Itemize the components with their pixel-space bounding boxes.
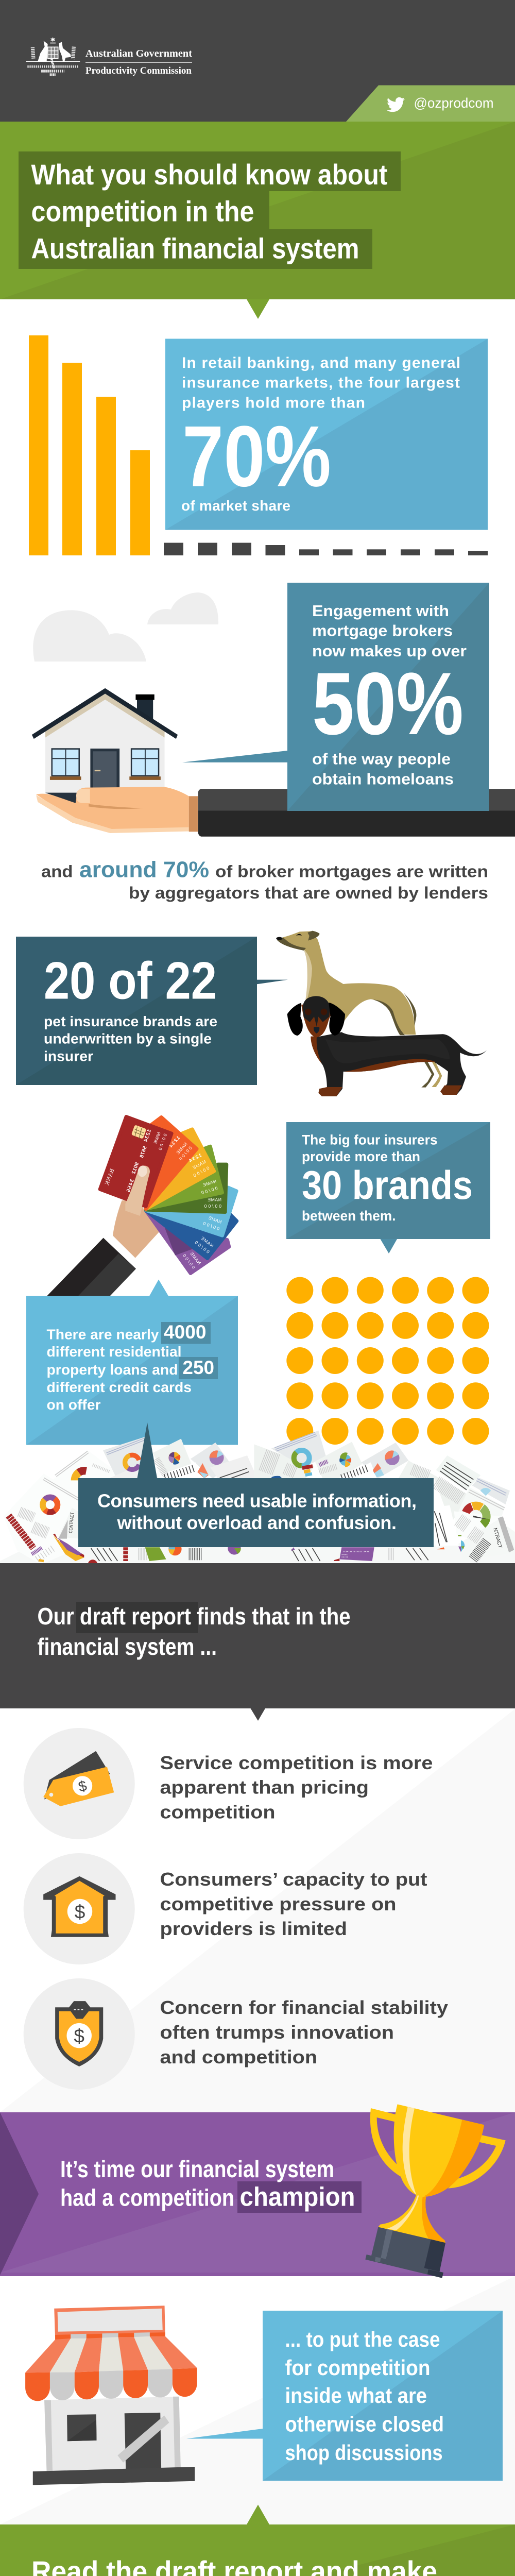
callout: 4000 loans and 250 credit cards: on offer — [46, 1397, 101, 1413]
card lettering: BANK — [104, 1168, 115, 1187]
callout: 4000 loans and 250 credit cards: different credit cards — [46, 1379, 192, 1395]
illustration: closed shop — [25, 2306, 197, 2485]
callout: case for competition: inside what are — [285, 2383, 427, 2408]
illustration: clouds — [33, 592, 218, 662]
callout: case for competition: shop discussions — [285, 2441, 443, 2465]
callout: 30 brands: The big four insurers — [302, 1132, 438, 1148]
callout: 20 of 22 pet insurance brands — [16, 937, 288, 1085]
callout: 4000 loans and 250 credit cards — [26, 1280, 238, 1445]
twitter tab: @ozprodcom — [414, 95, 493, 111]
illustration: pile of documents, right: 1234 5678 9012 3456 — [342, 1550, 370, 1553]
callout: 20 of 22 pet insurance brands: underwritten by a single — [44, 1030, 212, 1047]
panel: draft report findings heading — [0, 1563, 515, 1721]
illustration: trophy — [365, 2104, 506, 2278]
callout: 20 of 22 pet insurance brands: pet insurance brands are — [44, 1013, 217, 1029]
text block: around 70% of broker mortgages — [41, 857, 488, 902]
hand — [113, 1200, 160, 1258]
card lettering: 00/00 — [182, 1253, 196, 1270]
card lettering: 00/00 — [194, 1240, 211, 1255]
finding: service competition: apparent than pricing — [160, 1776, 369, 1798]
panel: shop section background — [0, 2276, 515, 2524]
callout: 20 of 22 pet insurance brands: 20 of 22 — [44, 951, 217, 1010]
callout: 50% of homeloans: of the way people — [312, 750, 451, 768]
finding: financial stability: Concern for financial stability — [160, 1997, 448, 2018]
illustration: hand holding a fan of credit cards — [47, 1116, 237, 1296]
text block: around 70% of broker mortgages: of broker mortgages are written — [215, 862, 488, 881]
dot grid: 30 insurance brands — [286, 1277, 489, 1445]
card lettering: NAME — [152, 1131, 162, 1145]
twitter tab — [346, 86, 515, 122]
card lettering: 5678 — [139, 1145, 148, 1159]
card lettering — [104, 1129, 222, 1270]
bar chart: market share of the four largest players — [29, 335, 488, 555]
icon: shield: $ — [74, 2025, 84, 2046]
panel: competition champion — [0, 2112, 515, 2276]
thumb — [125, 1165, 150, 1216]
illustration: pile of documents, left — [0, 1436, 258, 1569]
callout: 4000 loans and 250 credit cards: property loans and — [46, 1362, 178, 1378]
illustration: pile of documents, right: 00/00 — [341, 1556, 348, 1558]
card lettering: 3456 — [126, 1178, 135, 1193]
card lettering: NAME — [175, 1141, 188, 1155]
illustration: house held on a hand — [32, 688, 198, 833]
panel: 70% of market share: players hold more than — [182, 394, 365, 411]
finding: consumers' capacity: competitive pressure on — [160, 1893, 397, 1914]
title: competition in the — [31, 195, 254, 228]
panel: draft report findings heading: Our draft report finds that in the — [37, 1603, 350, 1630]
callout: case for competition: for competition — [285, 2355, 431, 2380]
title — [31, 158, 387, 265]
icon: shield — [55, 2001, 103, 2066]
card lettering: NAME — [208, 1215, 222, 1225]
callout: 4000 loans and 250 credit cards: There are nearly — [46, 1326, 159, 1343]
card lettering: 00/00 — [192, 1165, 210, 1178]
card lettering: NAME — [200, 1235, 215, 1248]
finding: financial stability: often trumps innovation — [160, 2022, 394, 2043]
finding: consumers' capacity: Consumers’ capacity to put — [160, 1869, 427, 1890]
illustration: pile of documents, right: NAME — [341, 1553, 348, 1555]
logo: Australian Government crest: Productivity Commission — [85, 65, 192, 76]
header bar — [0, 0, 515, 122]
icon: bank building: $ — [75, 1901, 85, 1922]
icon: price tags — [43, 1751, 114, 1806]
callout: consumers need usable information: without overload and confusion. — [116, 1512, 397, 1533]
logo: Australian Government crest — [26, 37, 192, 76]
card lettering: NAME — [189, 1251, 202, 1265]
callout: 30 brands — [286, 1122, 490, 1253]
panel: 70% of market share: insurance markets, the four largest — [182, 375, 460, 392]
card lettering: 00/00 — [201, 1185, 218, 1195]
finding: financial stability — [24, 1978, 448, 2090]
callout: consumers need usable information: Consumers need usable information, — [97, 1490, 417, 1512]
card lettering: 00/00 — [204, 1204, 221, 1209]
callout: 50% of homeloans: 50% — [312, 654, 464, 753]
callout: 20 of 22 pet insurance brands: insurer — [44, 1048, 93, 1064]
callout: 4000 loans and 250 credit cards: different residential — [46, 1344, 181, 1360]
card lettering: 00/00 — [178, 1145, 193, 1161]
greyhound — [276, 931, 442, 1088]
callout: 50% of homeloans: mortgage brokers — [312, 622, 453, 640]
card lettering: NAME — [202, 1179, 217, 1188]
callout: 30 brands: between them. — [302, 1208, 396, 1224]
text block: around 70% of broker mortgages: around 70% — [79, 857, 209, 883]
text block: around 70% of broker mortgages: and — [41, 862, 73, 881]
card lettering: NAME — [208, 1197, 221, 1202]
callout: 30 brands: provide more than — [302, 1149, 420, 1164]
callout: consumers need usable information — [78, 1422, 434, 1547]
finding: service competition — [24, 1728, 433, 1839]
icon: twitter bird — [387, 97, 405, 112]
panel: draft report findings heading: financial system ... — [37, 1633, 217, 1660]
finding: consumers' capacity — [24, 1853, 427, 1964]
panel: competition champion: had a competition — [60, 2184, 234, 2211]
sleeve — [47, 1238, 136, 1296]
icon: price tags: $ — [77, 1777, 89, 1795]
callout: case for competition: ... to put the case — [285, 2327, 440, 2351]
callout: 50% of homeloans — [182, 583, 489, 811]
card lettering: 9012 — [131, 1162, 140, 1175]
panel: 70% of market share: 70% — [182, 408, 331, 505]
card lettering: 1234 — [188, 1153, 202, 1163]
credit cards — [100, 1116, 237, 1274]
icon: bank building — [43, 1876, 116, 1937]
card lettering: 00/00 — [202, 1221, 220, 1231]
panel: 70% of market share — [165, 339, 488, 530]
callout: 4000 loans and 250 credit cards: 250 — [182, 1357, 214, 1378]
finding: service competition: Service competition is more — [160, 1752, 433, 1773]
callout: case for competition — [186, 2311, 503, 2481]
callout: 30 brands: 30 brands — [302, 1162, 473, 1208]
callout: case for competition: otherwise closed — [285, 2412, 444, 2436]
panel: call to action — [0, 2505, 515, 2576]
callout: 50% of homeloans: now makes up over — [312, 642, 467, 660]
card lettering: NAME — [192, 1159, 207, 1171]
illustration: greyhound and dachshund — [276, 931, 487, 1096]
dachshund — [287, 996, 487, 1096]
card lettering: 1234 — [168, 1135, 181, 1149]
logo: Australian Government crest: Australian Government — [85, 48, 192, 59]
finding: consumers' capacity: providers is limited — [160, 1918, 347, 1939]
callout: 4000 loans and 250 credit cards: 4000 — [164, 1321, 206, 1343]
title panel — [0, 122, 515, 319]
illustration: sleeve — [198, 789, 515, 837]
text block: around 70% of broker mortgages: by aggregators that are owned by lenders — [129, 884, 488, 902]
panel: 70% of market share: In retail banking, and many general — [182, 354, 460, 371]
panel: competition champion: It’s time our financial system — [60, 2156, 334, 2182]
panel: 70% of market share: of market share — [181, 498, 290, 514]
title: What you should know about — [31, 158, 387, 191]
panel: competition champion: champion — [240, 2182, 355, 2212]
finding: service competition: competition — [160, 1801, 275, 1823]
title: Australian financial system — [31, 232, 359, 265]
callout: 50% of homeloans: Engagement with — [312, 602, 449, 620]
callout: 50% of homeloans: obtain homeloans — [312, 770, 454, 788]
card lettering: 00/00 — [158, 1133, 168, 1151]
illustration: pile of documents, right — [254, 1431, 515, 1563]
finding: financial stability: and competition — [160, 2046, 317, 2067]
illustration: pile of documents, left: CONTRACT — [68, 1512, 75, 1533]
illustration: pile of documents, right: NTRACT — [492, 1528, 503, 1549]
findings background — [0, 1709, 515, 2112]
card lettering: 1234 — [143, 1129, 152, 1143]
